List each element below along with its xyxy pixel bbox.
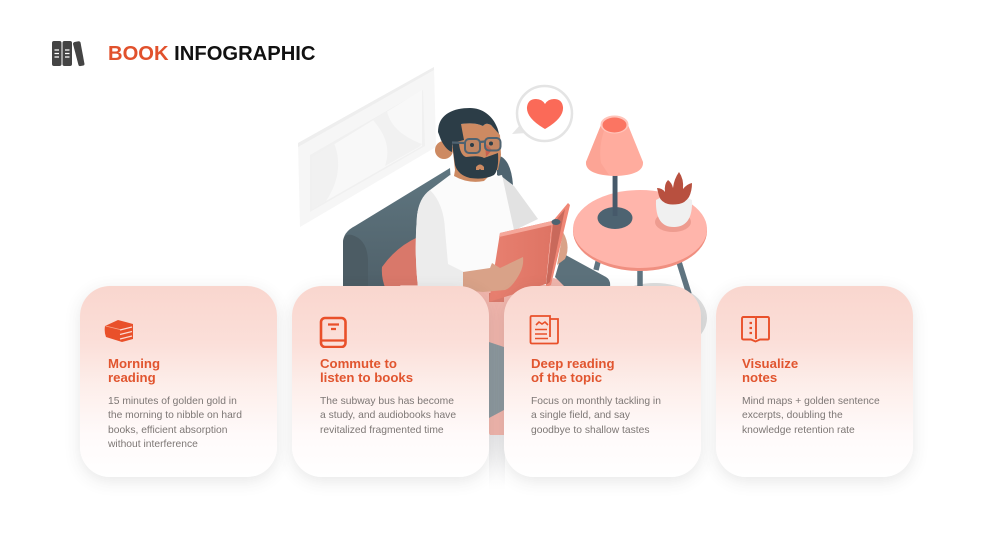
card: visualize notes (716, 286, 913, 477)
right sleeve (500, 175, 538, 231)
heading: Deep reading (531, 356, 615, 371)
body text: revitalized fragmented time (320, 425, 444, 436)
body text: a study, and audiobooks have (320, 410, 456, 421)
body text: knowledge retention rate (742, 425, 855, 436)
body text: the morning to nibble on hard (108, 410, 242, 421)
icon: book stack (104, 320, 133, 342)
title: BOOK INFOGRAPHIC (108, 43, 315, 65)
speech bubble with heart (512, 86, 572, 141)
heading: listen to books (320, 370, 413, 385)
body text: The subway bus has become (320, 396, 454, 406)
body text (108, 396, 242, 450)
body text: Mind maps + golden sentence (742, 396, 880, 406)
card: commute (292, 286, 489, 477)
heading: Commute to (320, 356, 397, 371)
lamp (586, 116, 643, 229)
card: morning reading (80, 286, 277, 477)
lower body behind cards (400, 285, 610, 435)
wall picture (298, 67, 436, 227)
body text: goodbye to shallow tastes (531, 425, 650, 436)
man's leg (555, 253, 610, 287)
heading (320, 356, 413, 385)
icon: closed book (320, 316, 347, 348)
table shadow (603, 283, 707, 353)
heading (108, 356, 160, 385)
sofa (343, 155, 513, 290)
body text: without interference (108, 439, 198, 450)
table legs (596, 258, 689, 294)
body text: Focus on monthly tackling in (531, 396, 661, 406)
head (435, 108, 501, 182)
heading: Morning (108, 356, 160, 371)
book (489, 203, 570, 302)
floor shadow (489, 420, 505, 490)
card: deep reading (504, 286, 701, 477)
heading: notes (742, 370, 777, 385)
side table (573, 190, 707, 271)
pink lap (548, 278, 585, 290)
heading: of the topic (531, 370, 602, 385)
body text (320, 396, 456, 436)
arm (463, 257, 523, 292)
icon: books logo (52, 41, 84, 66)
heading: Visualize (742, 356, 798, 371)
heading: reading (108, 370, 156, 385)
heading (742, 356, 798, 385)
torso (416, 175, 520, 288)
heading (531, 356, 615, 385)
plant (655, 172, 692, 232)
body text (742, 396, 880, 436)
body text: 15 minutes of golden gold in (108, 396, 237, 406)
body text (531, 396, 661, 436)
icon: newspaper (530, 315, 559, 344)
body text: books, efficient absorption (108, 425, 227, 436)
hand behind book (557, 232, 568, 265)
body text: a single field, and say (531, 410, 630, 421)
body text: excerpts, doubling the (742, 410, 843, 421)
cushion (382, 237, 418, 290)
icon: open book (741, 316, 770, 342)
